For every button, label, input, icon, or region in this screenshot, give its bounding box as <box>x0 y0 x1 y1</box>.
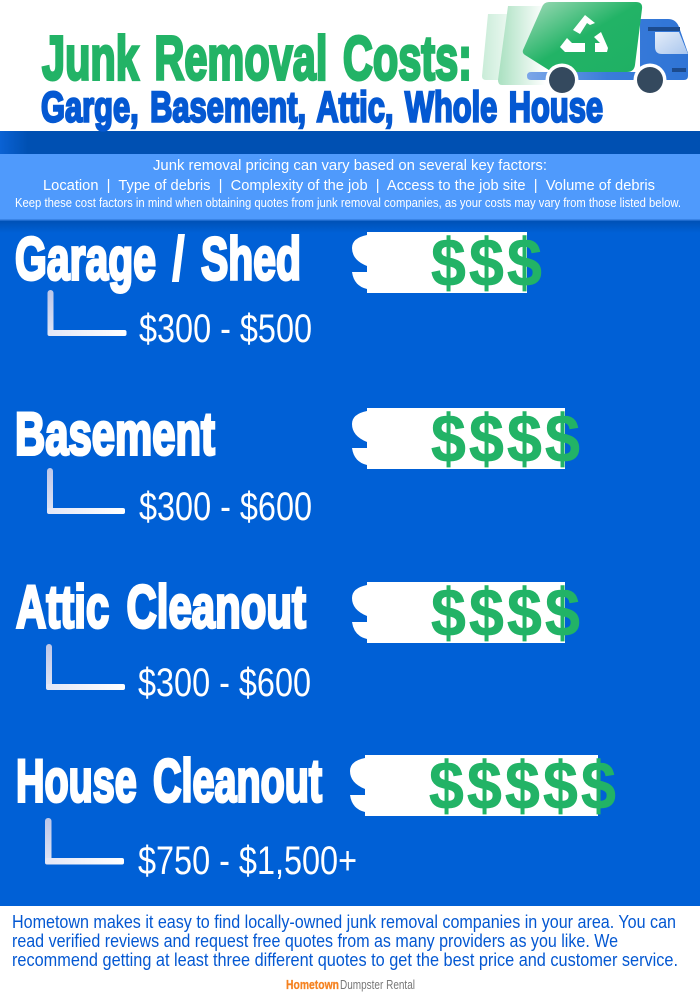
band shadow <box>0 220 700 233</box>
logo <box>286 977 415 992</box>
main blue background <box>0 131 700 906</box>
logo: Dumpster Rental <box>340 977 415 992</box>
connector arrow <box>46 644 125 690</box>
panel: basement <box>15 400 583 529</box>
cost meter <box>352 225 545 301</box>
factors list: Location | Type of debris | Complexity of the job | Access to the job site | Volume of debris <box>43 177 655 194</box>
connector arrow <box>48 290 126 336</box>
heading: Attic Cleanout <box>16 574 306 640</box>
cost meter <box>352 401 583 477</box>
title: Junk Removal Costs: <box>42 24 472 94</box>
cost meter: $$$$ <box>431 401 583 477</box>
cost meter <box>352 575 583 651</box>
price: $300 - $600 <box>138 661 311 705</box>
heading: Garage / Shed <box>15 226 301 292</box>
price: $300 - $600 <box>139 485 312 529</box>
panel: house cleanout <box>16 748 619 883</box>
factors intro: Junk removal pricing can vary based on several key factors: <box>153 157 547 174</box>
panel: garage shed <box>15 225 545 351</box>
price: $300 - $500 <box>139 307 312 351</box>
cost meter: $$$$$ <box>429 748 619 824</box>
panel: pricing factors <box>0 154 700 220</box>
icon: recycling truck <box>482 2 688 96</box>
heading: Basement <box>15 400 215 468</box>
connector arrow <box>47 468 125 514</box>
dark blue top band <box>0 131 700 154</box>
footer text: read verified reviews and request free quotes from as many providers as you like. We <box>12 931 618 951</box>
connector arrow <box>45 818 124 864</box>
panel: attic cleanout <box>16 574 583 705</box>
cost meter: $$$$ <box>431 575 583 651</box>
heading: House Cleanout <box>16 748 322 814</box>
price: $750 - $1,500+ <box>138 839 357 883</box>
cost meter: $$$ <box>431 225 545 301</box>
footer text <box>12 912 678 970</box>
logo: Hometown <box>286 977 339 992</box>
